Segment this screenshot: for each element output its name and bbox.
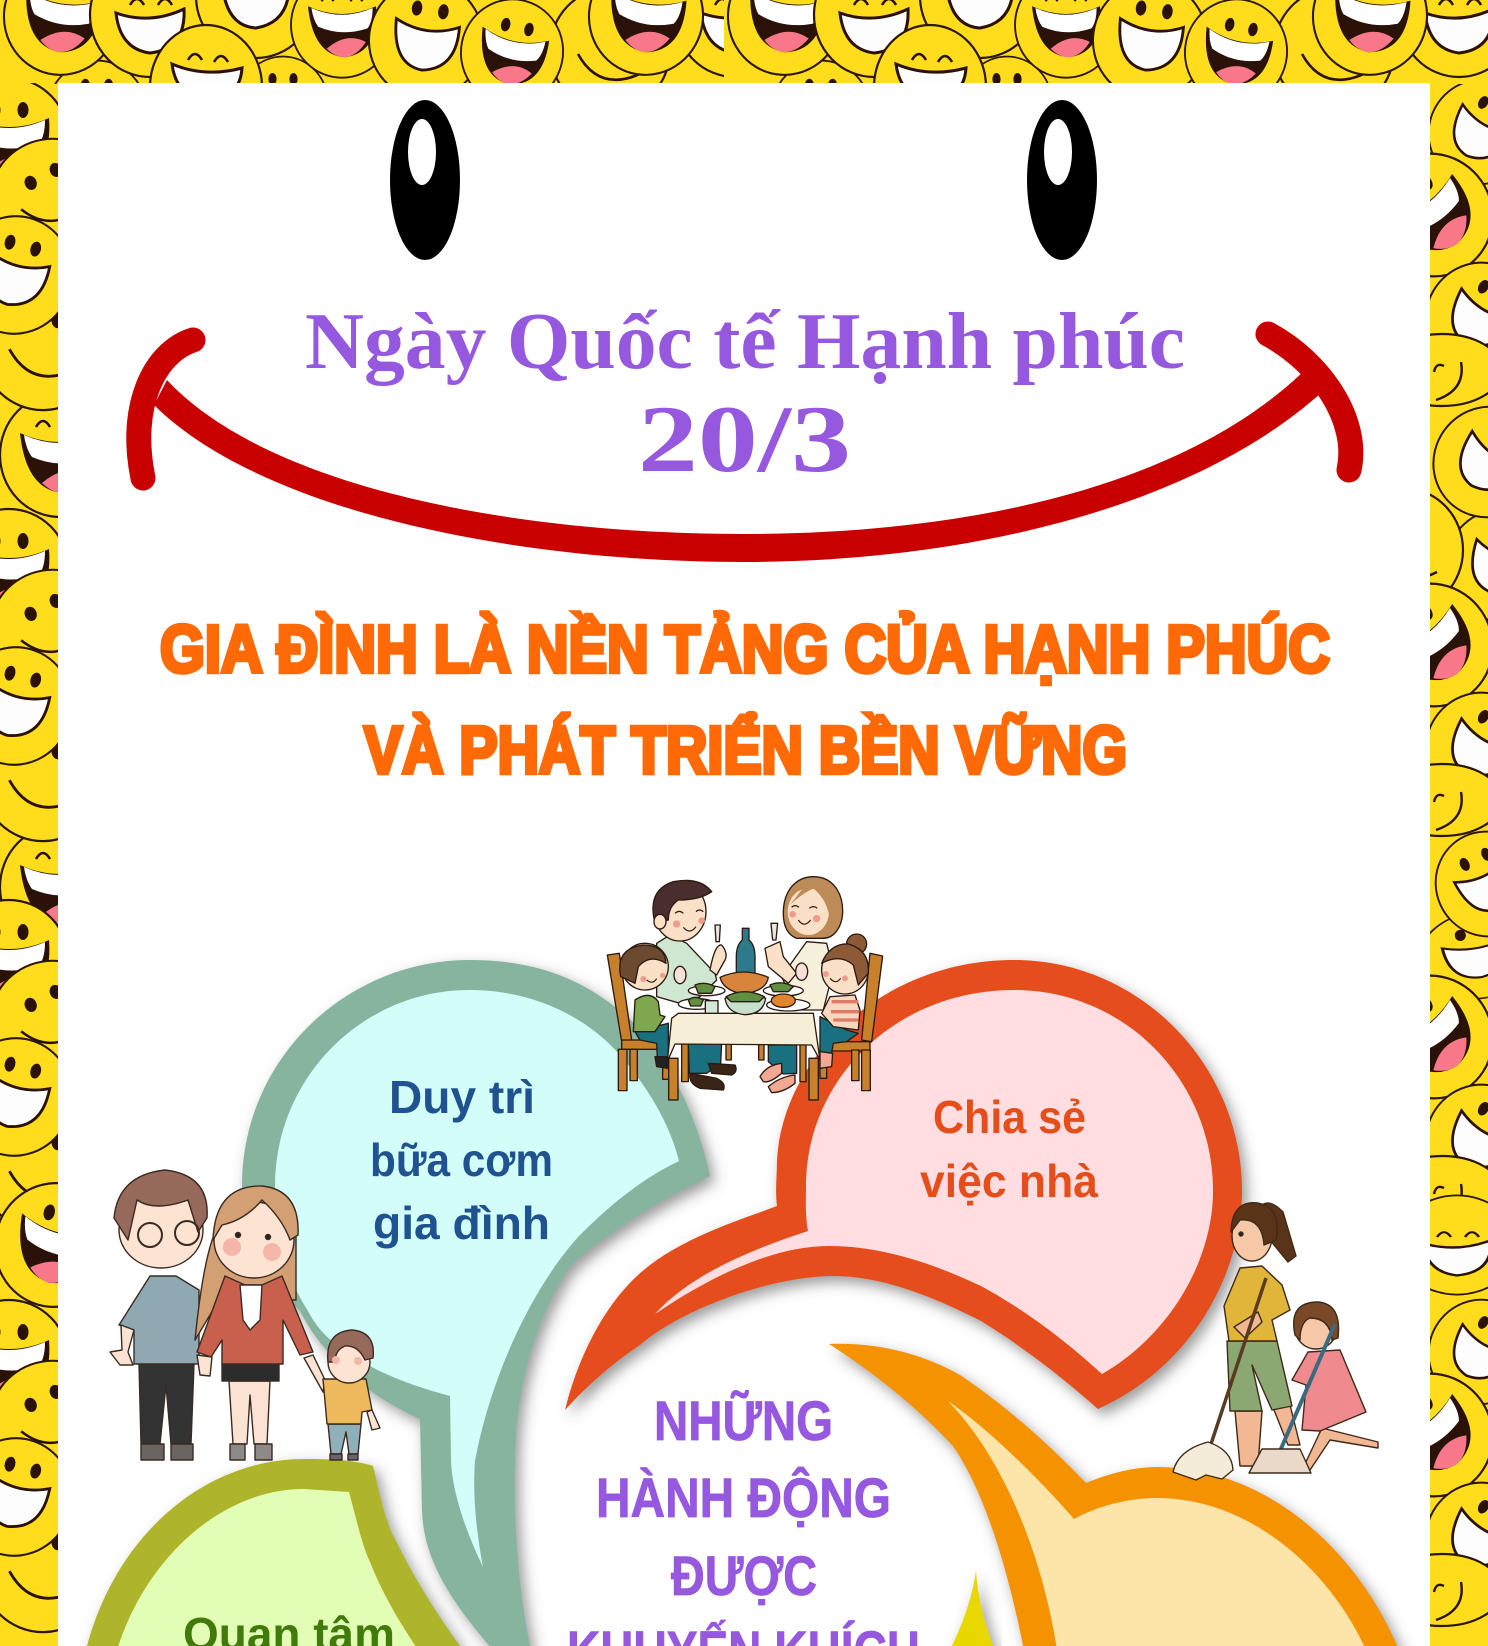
- broom: [1249, 1324, 1335, 1473]
- illustration: family dinner: [607, 877, 883, 1100]
- speech bubble: caring: [86, 1459, 463, 1646]
- central heading: [567, 1389, 920, 1646]
- speech bubble: yellow tail: [950, 1570, 995, 1646]
- bubble text: family meals: Duy trì: [389, 1071, 535, 1123]
- right chair: [820, 953, 883, 1091]
- tablecloth: [667, 1013, 820, 1062]
- central heading: HÀNH ĐỘNG: [596, 1466, 891, 1529]
- title: [305, 298, 1185, 492]
- smiley face: [139, 100, 1351, 562]
- speech bubble: family meals: [242, 960, 710, 1646]
- left chair: [607, 953, 669, 1091]
- bubble text: sharing chores: việc nhà: [920, 1155, 1098, 1207]
- bubble text: family meals: gia đình: [373, 1197, 550, 1249]
- dad: [653, 880, 736, 1090]
- smiley border: left strip: [0, 83, 58, 1634]
- illustration: mother and daughter cleaning: [1173, 1203, 1378, 1480]
- table legs: [669, 1043, 818, 1100]
- headline: [160, 612, 1330, 788]
- smile mouth: [139, 334, 1351, 562]
- title: 20/3: [638, 386, 851, 492]
- father: [110, 1170, 207, 1460]
- mum: [760, 877, 843, 1093]
- speech bubble: orange: [829, 1344, 1399, 1646]
- right eye: [1027, 100, 1097, 260]
- bubble text: family meals: [370, 1071, 553, 1249]
- mother: [1224, 1203, 1300, 1466]
- headline: GIA ĐÌNH LÀ NỀN TẢNG CỦA HẠNH PHÚC: [160, 612, 1330, 687]
- mother: [195, 1186, 313, 1460]
- speech bubble: sharing chores: [565, 960, 1242, 1410]
- child: [304, 1330, 380, 1460]
- smiley border: right strip: [1430, 84, 1488, 1628]
- bubble text: sharing chores: [920, 1091, 1098, 1207]
- central heading: ĐƯỢC: [671, 1544, 817, 1607]
- mop: [1173, 1278, 1266, 1480]
- bottle: [736, 928, 755, 977]
- left eye: [390, 100, 460, 260]
- title: Ngày Quốc tế Hạnh phúc: [305, 298, 1185, 386]
- central heading: NHỮNG: [654, 1389, 833, 1452]
- bubble text: family meals: bữa cơm: [370, 1134, 553, 1186]
- daughter: [1292, 1302, 1378, 1470]
- girl: [820, 934, 868, 1068]
- food dishes: [678, 972, 810, 1015]
- illustration: couple and child: [110, 1170, 380, 1460]
- wine glasses: [674, 963, 808, 984]
- boy: [620, 943, 668, 1068]
- smiley border: top strip: [2, 0, 1488, 84]
- bubble text: sharing chores: Chia sẻ: [933, 1091, 1086, 1143]
- headline: VÀ PHÁT TRIỂN BỀN VỮNG: [364, 713, 1127, 788]
